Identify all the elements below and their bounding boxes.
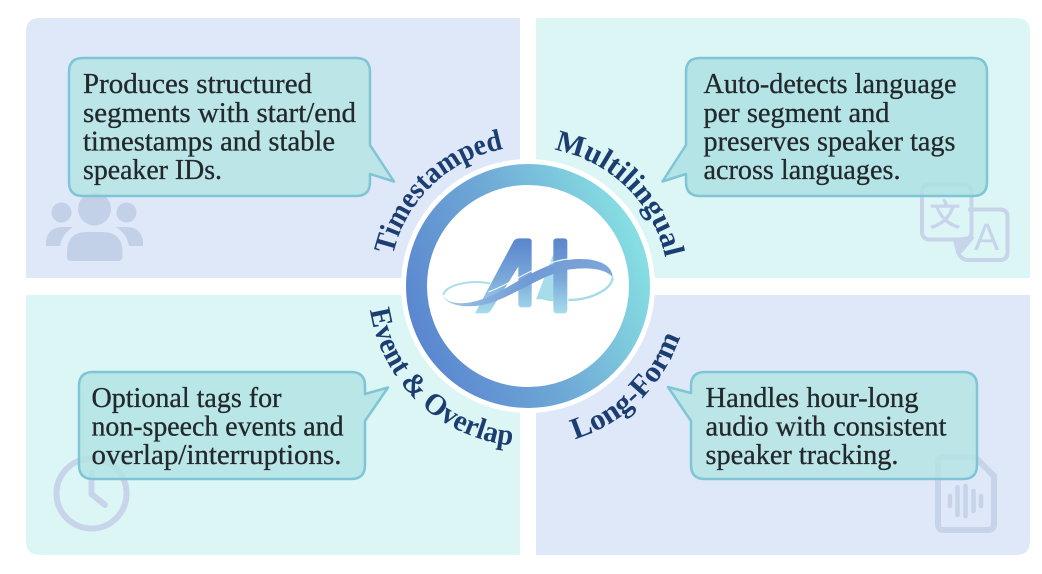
callout: timestamped: [69, 58, 394, 196]
callout: multilingual: Auto-detects language: [704, 69, 956, 100]
panel: long-form: [536, 295, 1030, 555]
callout: multilingual: preserves speaker tags: [704, 126, 956, 158]
icon: people: [46, 192, 143, 261]
callout: event and overlap: Optional tags for: [92, 383, 282, 414]
label: Multilingual: Multilingual: [554, 130, 685, 258]
callout: timestamped: segments with start/end: [83, 98, 356, 129]
icon: audio file: [938, 457, 994, 530]
callout: multilingual: [662, 58, 987, 196]
icon: translate: [922, 184, 1008, 260]
panel: multilingual: [536, 18, 1030, 278]
callout: long-form: [668, 372, 977, 479]
callout: timestamped: timestamps and stable: [83, 126, 335, 158]
callout: multilingual: across languages.: [704, 155, 900, 186]
callout: event and overlap: overlap/interruptions.: [92, 440, 342, 471]
callout: timestamped: speaker IDs.: [83, 155, 222, 186]
callout: long-form: speaker tracking.: [706, 440, 898, 471]
callout: event and overlap: [79, 372, 388, 479]
callout: timestamped: Produces structured: [83, 69, 312, 100]
callout: event and overlap: non-speech events and: [92, 412, 344, 442]
callout: multilingual: per segment and: [704, 98, 890, 129]
panel: event and overlap: [26, 295, 520, 555]
label: Timestamped: Timestamped: [374, 128, 504, 251]
label: Long-Form: Long-Form: [568, 334, 680, 440]
icon: clock: [56, 458, 126, 528]
callout: long-form: audio with consistent: [706, 412, 947, 442]
icon: translate: A: [974, 217, 1000, 259]
central ring: [401, 159, 655, 413]
label: Event & Overlap: Event & Overlap: [370, 306, 512, 451]
panel: timestamped: [26, 18, 520, 278]
icon: translate: 文: [930, 190, 960, 235]
logo: [443, 238, 613, 313]
callout: long-form: Handles hour-long: [706, 383, 918, 414]
